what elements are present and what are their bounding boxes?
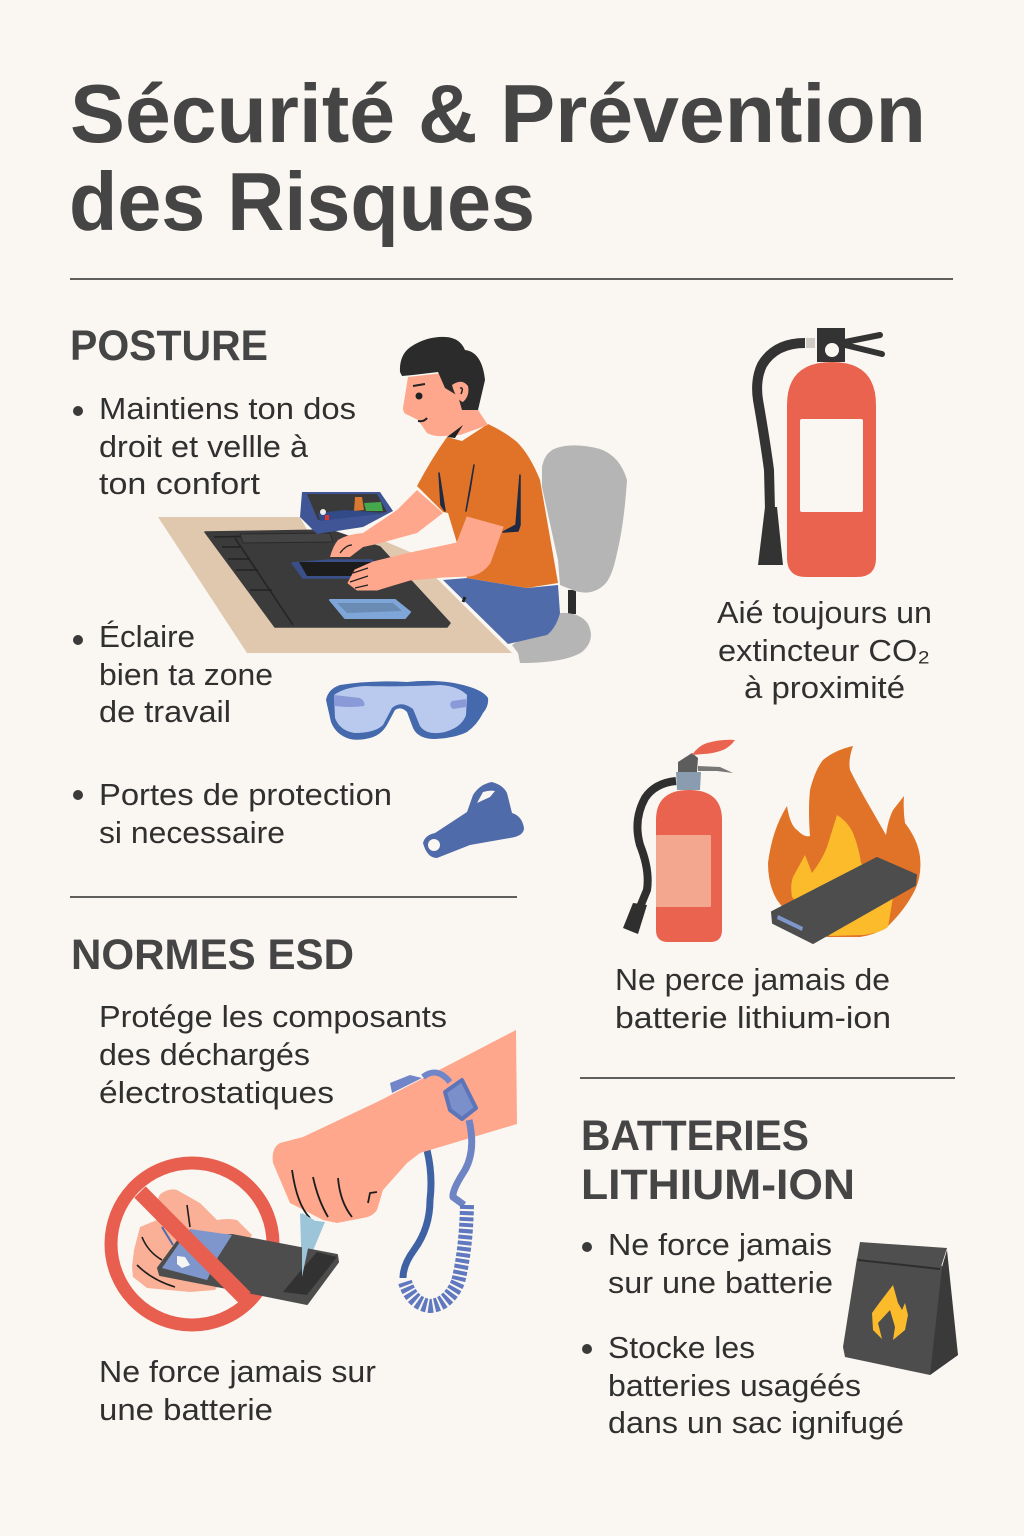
heading: normes esd: NORMES ESD [71,931,354,979]
antistatic mat [205,530,450,627]
text: décharges: des déchargés [99,1037,310,1072]
blade [300,1213,325,1277]
bullet: stockage: batteries usagéés [608,1368,861,1403]
bullet: ne force jamais [582,1227,833,1300]
text: décharges [99,999,447,1110]
title [69,67,926,248]
icon: large CO2 extinguisher [757,328,882,577]
dark cord [403,1150,431,1278]
caption: batterie lithium-ion [615,962,891,1035]
strap loop and clasp [423,1073,450,1082]
text: ne force jamais: Ne force jamais sur [99,1354,376,1389]
text: ne force jamais [99,1354,376,1427]
heading: batteries lithium-ion [581,1112,855,1209]
light cord [453,1120,472,1205]
bullet: éclairage: bien ta zone [99,657,273,692]
section: normes esd [71,931,447,1427]
title: des Risques [69,155,535,248]
bullet: protection: si necessaire [99,815,285,850]
prohibition ring [111,1163,273,1325]
head [403,370,488,436]
text: décharges: électrostatiques [99,1075,334,1110]
bullet: éclairage [73,619,273,729]
caption: batterie lithium-ion: batterie lithium-ion [615,1000,891,1035]
bullet: protection: Portes de protection [99,777,392,812]
caption: batterie lithium-ion: Ne perce jamais de [615,962,890,997]
section: batteries lithium-ion [581,1112,904,1440]
back arm [330,490,443,557]
bullet: ne force jamais: Ne force jamais [608,1227,832,1262]
caption: extincteur CO2: à proximité [744,670,905,705]
heading: batteries lithium-ion: BATTERIES [581,1112,809,1160]
icon: fireproof bag [843,1242,958,1375]
coil [405,1205,467,1306]
section: posture [70,322,392,850]
forearm and fist [273,1030,517,1223]
illustration: forbidden battery handling [111,1163,338,1325]
heading: batteries lithium-ion: LITHIUM-ION [581,1161,855,1209]
blue tray [292,560,378,578]
icon: burning battery [768,746,920,943]
text: ne force jamais: une batterie [99,1392,273,1427]
bullet: dos droit: ton confort [99,466,260,501]
prohibition slash [140,1192,245,1298]
title: Sécurité & Prévention [70,67,926,160]
bullet: dos droit: droit et vellle à [99,429,309,464]
text: décharges: Protége les composants [99,999,447,1034]
bullet: stockage: dans un sac ignifugé [608,1405,904,1440]
bullet: protection [73,777,392,850]
hand holding battery [132,1189,252,1292]
bullet: stockage: Stocke les [608,1330,755,1365]
bullet: éclairage: Éclaire [99,619,195,654]
shorts [443,578,560,644]
bullet: éclairage: de travail [99,694,231,729]
bullet: stockage [582,1330,904,1440]
icon: safety goggles [326,681,488,740]
caption: extincteur CO2: Aié toujours un [717,595,932,630]
instrument box [300,492,393,534]
bullet: ne force jamais: sur une batterie [608,1265,833,1300]
strap back [390,1075,422,1093]
battery [158,1235,338,1304]
caption: extincteur CO2 [717,595,932,705]
chair [512,445,627,663]
desk [158,517,512,653]
bullet: dos droit [73,391,356,501]
bullet: dos droit: Maintiens ton dos [99,391,356,426]
heading: posture: POSTURE [70,322,268,370]
shirt [417,424,558,588]
caption: extincteur CO2: extincteur CO₂ [718,633,930,668]
illustration: wrist strap and hand [273,1030,517,1306]
illustration: technician at workbench [158,337,627,663]
icon: small extinguisher [623,740,735,942]
icon: protective tool [423,782,524,858]
front arm [348,517,503,590]
